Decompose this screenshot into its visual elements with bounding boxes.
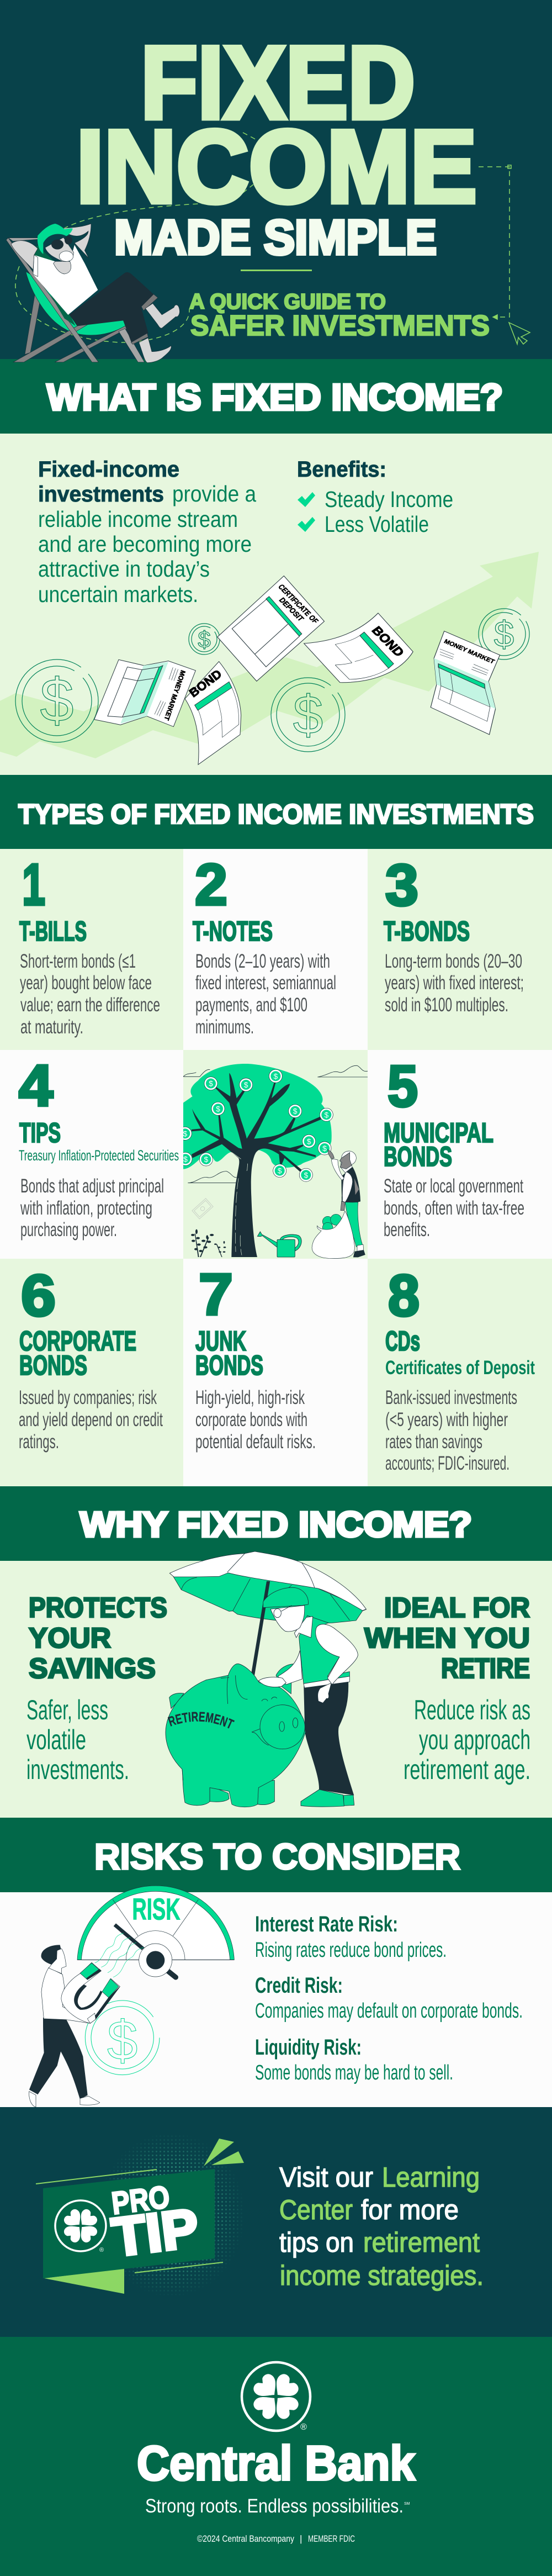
- text block: learning center call to action: Center: [279, 2194, 353, 2225]
- card 6: corporate bonds: Issued by companies; risk: [19, 1387, 157, 1408]
- card 7: junk bonds: JUNK: [195, 1326, 246, 1356]
- illustration: relaxed man on deck chair: [6, 224, 179, 363]
- documents: certificate, bond, money market: [217, 576, 500, 735]
- text block: learning center call to action: retirement: [363, 2227, 480, 2258]
- text block: benefits: Steady Income: [325, 487, 453, 512]
- text block: definition: attractive in today’s: [38, 556, 210, 582]
- card 4: tips: [0, 1050, 183, 1259]
- card 2: t-notes: [183, 849, 368, 1050]
- subtitle: quick guide: [189, 290, 490, 342]
- card 7: junk bonds: High-yield, high-risk: [195, 1387, 305, 1408]
- text block: definition: uncertain markets.: [38, 582, 198, 607]
- dashed path: header decoration: [15, 133, 509, 342]
- section band: what is fixed income: [0, 359, 552, 434]
- card 2: t-notes: minimums.: [195, 1016, 254, 1038]
- text block: definition: investments: [38, 482, 164, 506]
- illustration: umbrella, piggy bank and man: [166, 1551, 367, 1807]
- card 6: corporate bonds: ratings.: [19, 1431, 59, 1453]
- card 5: municipal bonds: benefits.: [384, 1219, 430, 1241]
- text block: learning center call to action: income strategies.: [280, 2260, 484, 2291]
- card 3: t-bonds: T-BONDS: [384, 916, 470, 947]
- card 4: tips: 4: [19, 1053, 53, 1118]
- tree trunk and branches: [192, 1073, 321, 1257]
- card 2: t-notes: T-NOTES: [193, 916, 273, 947]
- text block: risks: Credit Risk:: [255, 1973, 343, 1998]
- card 5: municipal bonds: 5: [388, 1054, 418, 1119]
- card 8: cds: CDs: [385, 1326, 420, 1356]
- card 8: cds: rates than savings: [385, 1431, 482, 1453]
- title: fixed income: FIXED: [141, 25, 415, 140]
- coin: $: [107, 2009, 137, 2071]
- heading: WHY FIXED INCOME?: [80, 1505, 472, 1544]
- text block: protects your savings: YOUR: [29, 1622, 111, 1654]
- panel: money tree illustration: $: [216, 1104, 220, 1113]
- heading: RISKS TO CONSIDER: [94, 1836, 460, 1877]
- card 3: t-bonds: 3: [385, 853, 418, 918]
- card 6: corporate bonds: CORPORATE: [19, 1326, 136, 1356]
- card 4: tips: TIPS: [19, 1117, 61, 1148]
- card 1: t-bills: at maturity.: [20, 1016, 83, 1038]
- text block: definition: and are becoming more: [38, 531, 252, 557]
- text block: learning center call to action: Visit our: [279, 2162, 373, 2193]
- legal line: MEMBER FDIC: [308, 2533, 355, 2544]
- text block: protects your savings: volatile: [26, 1724, 86, 1755]
- text block: learning center call to action: tips on: [279, 2227, 354, 2258]
- gauge: RISK: [132, 1892, 181, 1926]
- section band: types of investments: [0, 775, 552, 849]
- card 1: t-bills: T-BILLS: [19, 916, 87, 947]
- panel: money tree illustration: $: [278, 1166, 282, 1175]
- text block: ideal for when you retire: IDEAL FOR: [384, 1592, 530, 1623]
- coin sack: [322, 1216, 332, 1225]
- title: fixed income: [76, 25, 477, 224]
- panel: risks to consider: [0, 1886, 552, 2107]
- figure: man picking coins: [312, 1150, 365, 1259]
- umbrella: [173, 1573, 366, 1623]
- brand name: Central Bank: [137, 2436, 416, 2490]
- title: fixed income: INCOME: [76, 109, 477, 224]
- logo: clover small: [55, 2200, 106, 2253]
- card 8: cds: 8: [388, 1263, 420, 1328]
- documents: certificate, bond, money market: DEPOSIT: [277, 596, 306, 623]
- card 2: t-notes: Bonds (2–10 years) with: [195, 951, 330, 972]
- card 7: junk bonds: BONDS: [195, 1350, 263, 1381]
- text block: learning center call to action: for more: [361, 2194, 459, 2225]
- card 6: corporate bonds: [0, 1259, 183, 1486]
- card 1: t-bills: year) bought below face: [20, 972, 152, 994]
- banner: [43, 2169, 215, 2278]
- subtitle: quick guide: A QUICK GUIDE TO: [189, 290, 386, 314]
- card 7: junk bonds: potential default risks.: [195, 1431, 316, 1453]
- card 7: junk bonds: corporate bonds with: [195, 1409, 307, 1430]
- tree canopy: [183, 1064, 332, 1169]
- divider line: [241, 270, 312, 271]
- text block: risks: Interest Rate Risk:: [255, 1912, 398, 1936]
- figure: man holding magnet: [29, 1945, 120, 2107]
- card 5: municipal bonds: [368, 1050, 552, 1259]
- tagline: Strong roots. Endless possibilities.: [145, 2495, 404, 2517]
- icon: small coin: [189, 624, 220, 654]
- card 3: t-bonds: [368, 849, 552, 1050]
- logo: central bank clover: ®: [300, 2422, 307, 2432]
- card 4: tips: purchasing power.: [20, 1219, 117, 1241]
- panel: money tree illustration: [178, 1050, 368, 1259]
- subtitle: made simple: MADE SIMPLE: [114, 210, 437, 265]
- card 6: corporate bonds: 6: [21, 1263, 56, 1328]
- documents: certificate, bond, money market: MONEY MARKET: [443, 638, 496, 666]
- icon: dollar bill: [192, 1199, 213, 1219]
- text block: benefits: Benefits:: [297, 457, 386, 482]
- section band: risks to consider: [0, 1818, 552, 1892]
- icon: large coin: [15, 659, 98, 742]
- label: pro tip: TIP: [109, 2197, 201, 2268]
- card 2: t-notes: payments, and $100: [195, 994, 307, 1016]
- coin: [85, 2000, 160, 2075]
- card 2: t-notes: 2: [195, 852, 227, 917]
- card 4: tips: Treasury Inflation-Protected Securities: [19, 1147, 179, 1164]
- text block: benefits: Less Volatile: [325, 511, 429, 537]
- panel: money tree illustration: $: [324, 1110, 328, 1119]
- card 5: municipal bonds: MUNICIPAL: [384, 1117, 493, 1148]
- icon: right coin: [479, 609, 529, 659]
- card 5: municipal bonds: BONDS: [384, 1141, 452, 1172]
- panel: money tree illustration: $: [304, 1170, 308, 1179]
- panel: footer: [0, 2337, 552, 2576]
- halftone dots: [109, 2136, 242, 2292]
- documents: certificate, bond, money market: CERTIFICATE OF: [277, 583, 321, 625]
- text block: protects your savings: SAVINGS: [29, 1653, 156, 1684]
- text block: ideal for when you retire: WHEN YOU: [364, 1622, 530, 1654]
- panel: money tree illustration: $: [322, 1144, 327, 1153]
- man: [276, 1664, 294, 1694]
- text block: definition: Fixed-income: [38, 457, 179, 482]
- illustration: risk gauge and magnet man: [29, 1886, 234, 2107]
- card 7: junk bonds: [183, 1259, 368, 1486]
- text block: protects your savings: investments.: [26, 1754, 129, 1785]
- card 4: tips: Bonds that adjust principal: [20, 1175, 164, 1197]
- logo: clover small: ®: [99, 2247, 104, 2253]
- panel: pro tip: [0, 2107, 552, 2337]
- icon: middle coin: $: [293, 684, 323, 745]
- icon: right coin: $: [494, 614, 514, 654]
- text block: protects your savings: [26, 1592, 167, 1785]
- card 8: cds: [368, 1259, 552, 1486]
- text block: benefits: [297, 457, 453, 537]
- icon: small coin: $: [198, 626, 211, 652]
- panel: money tree illustration: $: [273, 1071, 278, 1080]
- card 1: t-bills: Short-term bonds (≤1: [20, 951, 136, 972]
- text block: ideal for when you retire: [364, 1592, 530, 1785]
- documents: certificate, bond, money market: BOND: [369, 624, 407, 659]
- chart arrow background: [0, 552, 539, 758]
- panel: header background: [0, 0, 552, 359]
- text block: risks: [255, 1912, 523, 2084]
- icon: check: [298, 517, 315, 532]
- heading: WHAT IS FIXED INCOME?: [47, 377, 503, 418]
- documents: left money market and bond: [94, 659, 241, 764]
- section band: why fixed income: [0, 1486, 552, 1561]
- panel: money tree illustration: $: [244, 1080, 248, 1089]
- card 1: t-bills: value; earn the difference: [20, 994, 160, 1016]
- subtitle: quick guide: SAFER INVESTMENTS: [190, 310, 490, 342]
- icon: cursor arrow: [493, 165, 530, 344]
- panel: money tree illustration: $: [307, 1137, 311, 1146]
- piggy bank: [169, 1693, 184, 1708]
- icon: check: [298, 492, 315, 507]
- panel: money tree illustration: $: [209, 1079, 213, 1088]
- money coins on branches: [178, 1069, 333, 1181]
- label: pro tip: PRO: [110, 2179, 172, 2221]
- plants: [191, 1229, 226, 1257]
- card 2: t-notes: fixed interest, semiannual: [195, 972, 336, 994]
- text block: definition: reliable income stream: [38, 506, 238, 532]
- icon: large coin: $: [40, 667, 74, 735]
- icon: middle coin: [271, 678, 345, 752]
- documents: left money market and bond: BOND: [187, 667, 224, 700]
- tagline: SM: [404, 2502, 410, 2506]
- magnet: [61, 1962, 120, 2023]
- piggy bank label: RETIREMENT: [168, 1712, 235, 1729]
- legal line: ©2024 Central Bancompany: [197, 2533, 294, 2544]
- text block: definition: [38, 457, 256, 607]
- card 1: t-bills: [0, 849, 183, 1050]
- text block: risks: Rising rates reduce bond prices.: [255, 1939, 447, 1962]
- panel: money tree illustration: $: [293, 1107, 298, 1116]
- card 7: junk bonds: 7: [199, 1262, 233, 1327]
- text block: protects your savings: Safer, less: [26, 1695, 108, 1725]
- gauge: [77, 1886, 234, 1977]
- card 6: corporate bonds: and yield depend on credit: [19, 1409, 163, 1430]
- text block: definition: provide a: [172, 481, 256, 506]
- panel: why fixed income: [0, 1551, 552, 1818]
- card 1: t-bills: 1: [22, 852, 45, 917]
- panel: money tree illustration: $: [183, 1154, 188, 1163]
- legal line: |: [300, 2533, 302, 2544]
- logo: central bank clover: [242, 2362, 310, 2432]
- panel: money tree illustration: $: [204, 1155, 208, 1164]
- documents: left money market and bond: MONEY MARKET: [162, 669, 187, 722]
- panel: what is fixed income: [0, 434, 552, 775]
- icon: watering can: [257, 1232, 301, 1257]
- text block: learning center call to action: Learning: [382, 2162, 480, 2193]
- card 6: corporate bonds: BONDS: [19, 1350, 87, 1381]
- text block: protects your savings: PROTECTS: [29, 1592, 167, 1623]
- text block: learning center call to action: [279, 2162, 484, 2291]
- panel: money tree illustration: $: [183, 1129, 187, 1138]
- card 4: tips: with inflation, protecting: [20, 1197, 152, 1219]
- text block: risks: Liquidity Risk:: [255, 2035, 362, 2060]
- banner accents: [44, 2139, 244, 2294]
- heading: TYPES OF FIXED INCOME INVESTMENTS: [18, 799, 534, 830]
- text block: ideal for when you retire: RETIRE: [441, 1653, 530, 1684]
